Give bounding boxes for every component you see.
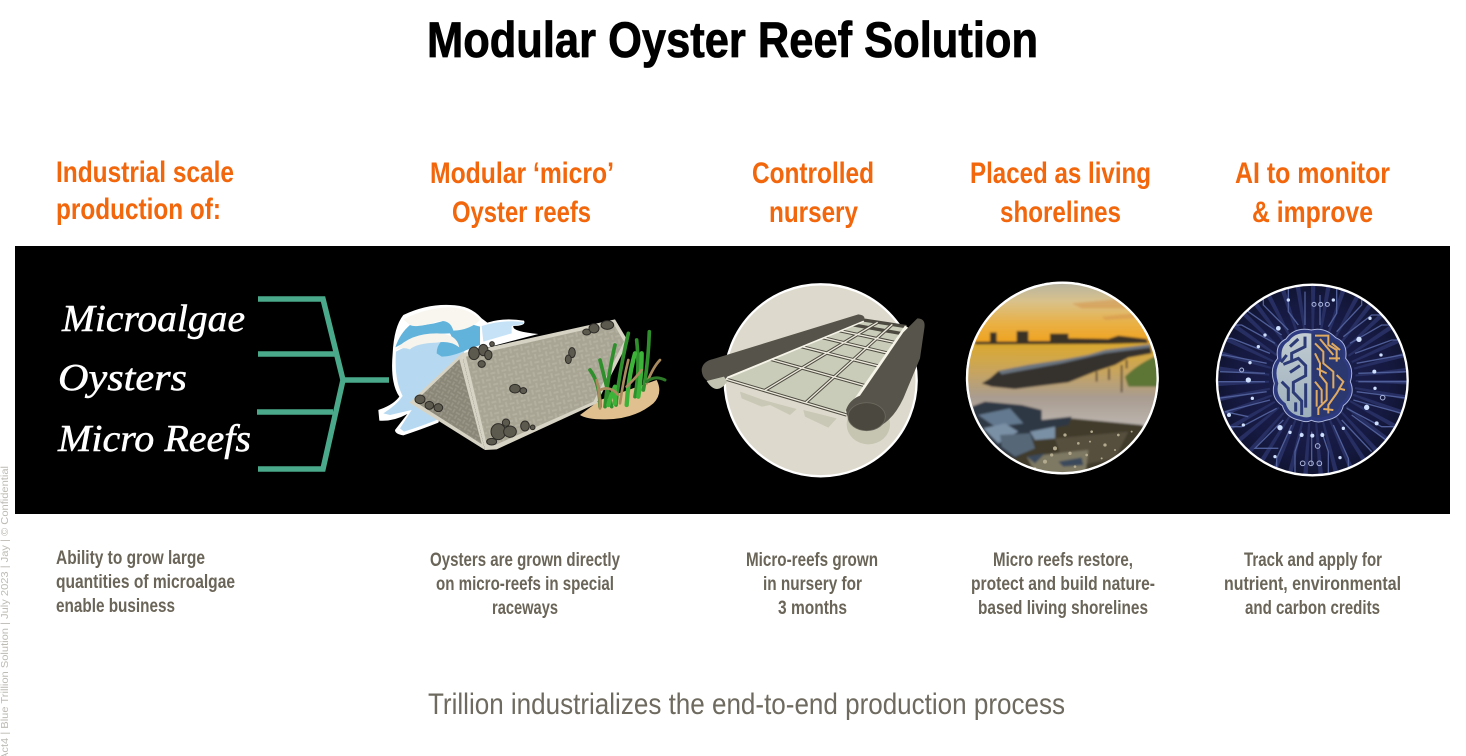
heading: controlled nursery	[752, 157, 874, 229]
sky	[974, 284, 1150, 345]
caption: oyster reefs: raceways	[492, 598, 558, 619]
brain right circuits	[1315, 336, 1345, 415]
caption: AI credits: Track and apply for	[1244, 550, 1382, 571]
handwritten list: inputs: Micro Reefs	[57, 418, 251, 460]
nursery circle	[725, 284, 917, 476]
caption: AI credits	[1224, 550, 1401, 619]
caption: AI credits: and carbon credits	[1245, 598, 1380, 619]
tray shadows	[740, 392, 837, 428]
heading: industrial scale production: production of:	[56, 193, 221, 226]
arrow: green bracket merging inputs	[257, 299, 389, 469]
caption: oyster reefs: Oysters are grown directly	[430, 550, 620, 571]
caption: nursery: in nursery for	[763, 574, 862, 595]
heading: placed as living shorelines: shorelines	[1000, 196, 1121, 229]
heading: AI to monitor and improve: AI to monitor	[1235, 157, 1390, 190]
reef body	[409, 319, 628, 450]
icon: nursery tray in beige circle	[702, 284, 925, 476]
horizon with cranes	[975, 331, 1148, 344]
grass	[590, 332, 665, 408]
caption: microalgae: Ability to grow large	[56, 548, 205, 569]
image: AI brain circuit board	[1216, 283, 1410, 477]
heading: placed as living shorelines	[970, 157, 1151, 229]
brain left maze	[1281, 337, 1306, 415]
circuit traces	[1217, 285, 1410, 475]
circuit rings	[1240, 302, 1385, 466]
heading: controlled nursery: nursery	[769, 196, 858, 229]
tray grid	[723, 320, 907, 415]
left float tube	[702, 314, 864, 383]
icon: micro reef with wave and grass	[378, 305, 665, 450]
right float tube	[846, 318, 925, 430]
sunburst traces	[1242, 310, 1382, 450]
caption: microalgae: enable business	[56, 596, 175, 617]
jetty	[982, 344, 1152, 389]
caption: shorelines	[971, 550, 1155, 619]
caption: shorelines: Micro reefs restore,	[993, 550, 1133, 571]
handwritten list: inputs: Oysters	[58, 357, 187, 399]
photo: rock living shoreline at sunset	[966, 282, 1159, 474]
wave	[378, 305, 538, 435]
caption: AI credits: nutrient, environmental	[1224, 574, 1401, 595]
caption: microalgae	[56, 548, 235, 617]
handwritten list: inputs	[57, 298, 251, 460]
water	[968, 342, 1156, 426]
heading: modular micro oyster reefs: Modular ‘micro’	[430, 157, 614, 190]
heading: placed as living shorelines: Placed as living	[970, 157, 1151, 190]
rocks	[972, 402, 1072, 458]
caption: oyster reefs	[430, 550, 620, 619]
oyster clusters	[415, 321, 614, 445]
handwritten list: inputs: Microalgae	[61, 298, 245, 340]
brain	[1272, 329, 1352, 422]
caption: shorelines: based living shorelines	[978, 598, 1148, 619]
heading: controlled nursery: Controlled	[752, 157, 874, 190]
shore speckle	[1034, 430, 1133, 470]
shore	[974, 410, 1144, 470]
marsh grass	[1125, 355, 1158, 387]
heading: industrial scale production: Industrial scale	[56, 156, 234, 189]
heading: modular micro oyster reefs: Oyster reefs	[452, 196, 591, 229]
heading: AI to monitor and improve	[1235, 157, 1390, 229]
sand	[580, 380, 659, 419]
title: Modular Oyster Reef Solution	[427, 12, 1038, 68]
side note: rotated confidentiality line: Act4 | Blue Trillion Solution | July 2023 | Jay | © Confidential	[0, 466, 11, 756]
caption: oyster reefs: on micro-reefs in special	[436, 574, 614, 595]
caption: shorelines: protect and build nature-	[971, 574, 1155, 595]
black band panel	[15, 246, 1450, 514]
caption: microalgae: quantities of microalgae	[56, 572, 235, 593]
tube ghost	[847, 404, 890, 444]
caption: nursery: Micro-reefs grown	[746, 550, 878, 571]
circuit glow nodes	[1227, 298, 1383, 459]
heading: AI to monitor and improve: & improve	[1252, 196, 1373, 229]
footer statement: Trillion industrializes the end-to-end production process	[428, 688, 1065, 721]
caption: nursery: 3 months	[778, 598, 847, 619]
heading: industrial scale production	[56, 156, 234, 226]
heading: modular micro oyster reefs	[430, 157, 614, 229]
caption: nursery	[746, 550, 878, 619]
